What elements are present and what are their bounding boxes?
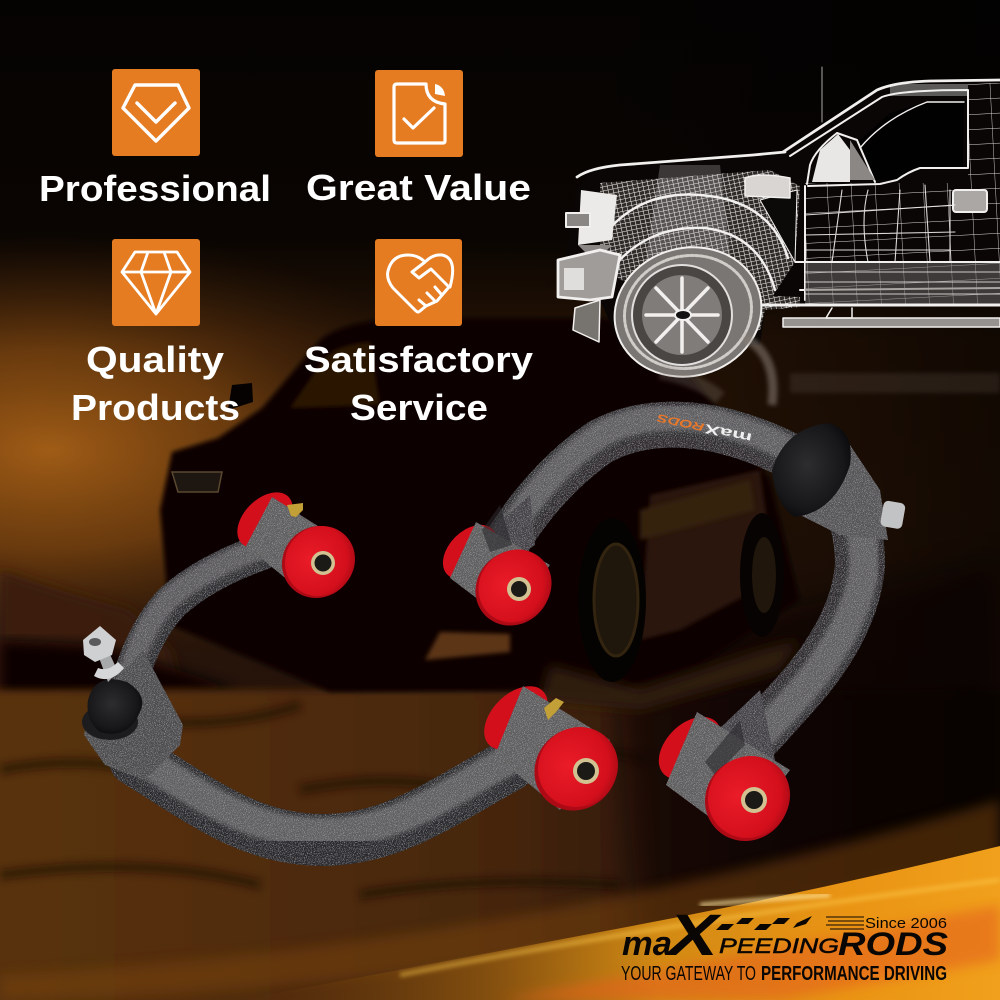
headlight [578,190,617,245]
right arm bushing gussets [490,495,775,770]
left arm bushing lower discs [472,674,635,828]
right arm logo marking [654,411,753,446]
icon tile: professional badge [112,69,200,156]
logo: maXpeedingRODS: YOUR GATEWAY TO [621,963,756,985]
right control arm [433,411,906,858]
logo: maXpeedingRODS: PEEDING [719,935,839,958]
bumper [558,250,620,300]
ball joint [82,626,142,740]
icon tile: quality diamond [112,239,200,326]
right arm bushing upper [433,505,567,641]
cab window [857,102,964,180]
logo: maXpeedingRODS: Since 2006 [865,915,947,932]
background pickup truck silhouette [160,318,800,710]
right arm bushing lower [647,705,807,858]
right arm logo marking: maX [703,421,753,446]
heading: Professional: Professional [39,168,271,209]
logo: checkered flag [716,916,812,930]
logo: maXpeedingRODS: X [664,903,722,968]
wireframe truck illustration [558,67,1000,393]
heading: Quality Products [71,339,240,428]
left arm bushing upper discs [227,482,369,613]
running board [783,318,1000,327]
engine bay dense mesh [600,170,800,300]
heading: Satisfactory Service: Satisfactory [304,339,533,380]
logo: maXpeedingRODS: PERFORMANCE DRIVING [761,963,947,985]
heading: Satisfactory Service [304,339,533,428]
left control arm [82,482,635,840]
wheel reflection [660,338,1000,405]
right arm logo marking: RODS [655,411,705,433]
heading: Satisfactory Service: Service [350,387,488,428]
door handle [953,190,987,212]
bottom orange swoosh band [0,800,1000,1000]
heading: Quality Products: Products [71,387,240,428]
icon tile: handshake heart [375,239,462,326]
logo: maXpeedingRODS [621,903,949,985]
door grid [805,183,1000,305]
heading: Great Value: Great Value [306,167,531,208]
logo: maXpeedingRODS: RODS [838,926,949,962]
heading: Quality Products: Quality [86,339,224,380]
cab rear pillars grid [968,83,1000,183]
door curves [805,185,955,262]
logo: maXpeedingRODS: ma [622,925,672,963]
right arm black ball joint cap [772,423,906,530]
front wheel [600,231,776,393]
icon tile: great value document [375,70,463,157]
